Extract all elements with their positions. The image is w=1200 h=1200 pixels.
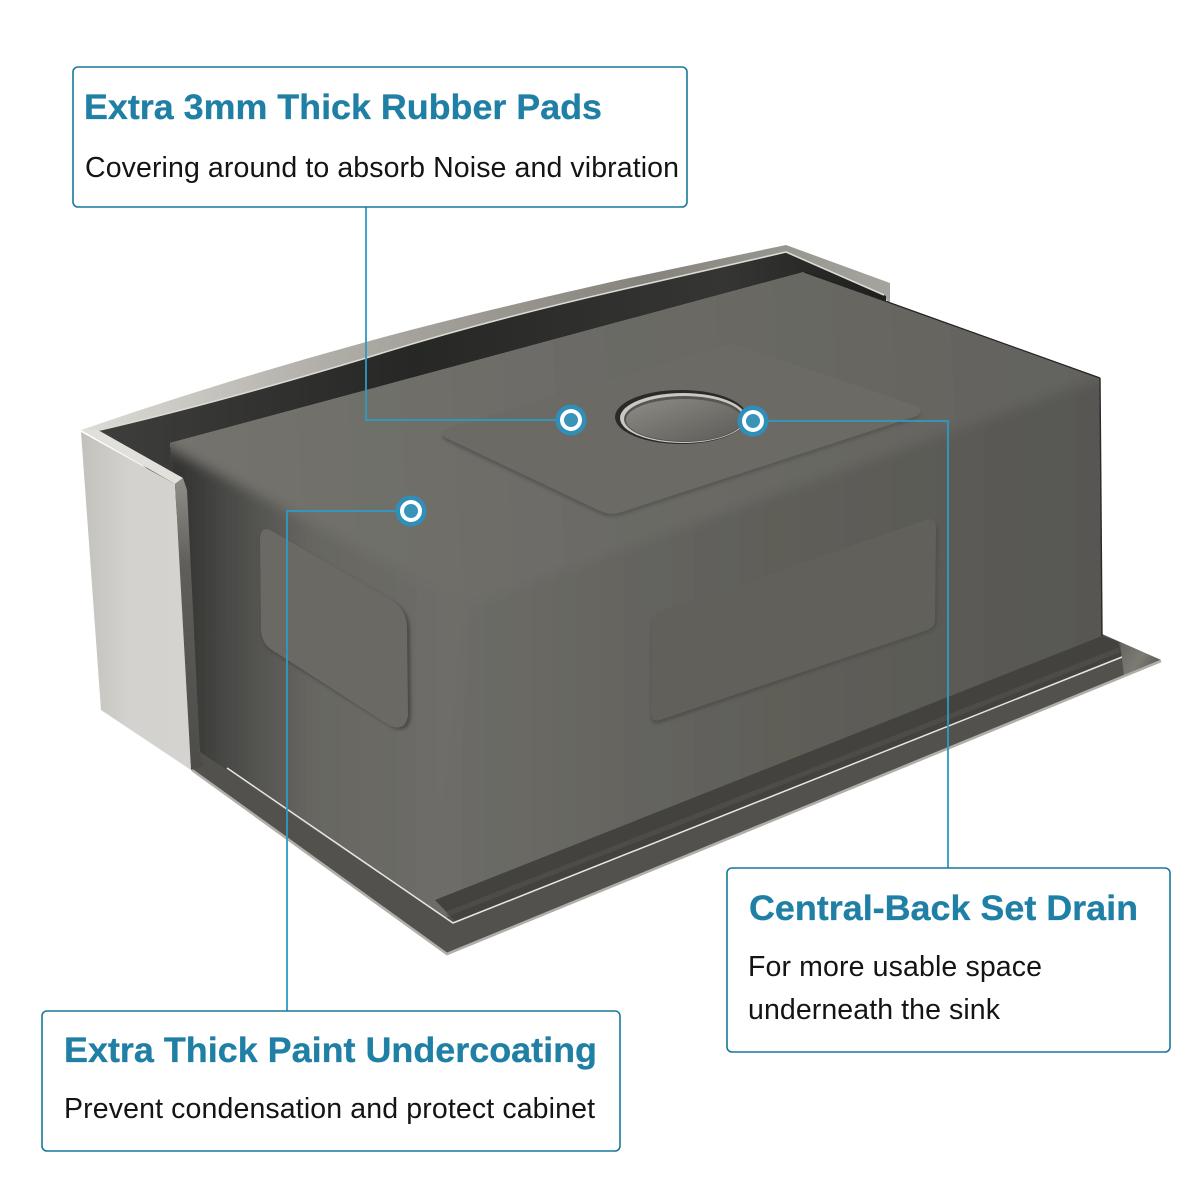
flange (192, 634, 1161, 953)
raised bottom strip (435, 636, 1122, 921)
marker: undercoating (396, 496, 426, 526)
heading: undercoating: Extra Thick Paint Undercoating (64, 1031, 597, 1070)
heading: rubber pads: Extra 3mm Thick Rubber Pads (84, 88, 602, 127)
text: undercoating: Prevent condensation and protect cabinet (64, 1093, 595, 1125)
callout: drain (727, 868, 1170, 1052)
text: drain: For more usable space (748, 951, 1042, 983)
leader line: undercoating (287, 511, 396, 1011)
callout: undercoating (42, 1011, 620, 1151)
text: drain: underneath the sink (748, 994, 1001, 1026)
marker: rubber pads (556, 404, 586, 436)
sink illustration (81, 240, 1161, 960)
right body face (442, 382, 1101, 918)
sink rim (81, 245, 890, 431)
callout: rubber pads (73, 67, 687, 207)
left body face (170, 442, 462, 909)
wall top edge (81, 430, 183, 484)
text: rubber pads: Covering around to absorb Noise and vibration (85, 152, 679, 184)
front wall (81, 432, 191, 770)
text: drain (748, 951, 1042, 1026)
left side pad (260, 529, 411, 730)
heading: drain: Central-Back Set Drain (749, 889, 1138, 928)
sink interior (98, 252, 886, 490)
leader line: drain (768, 421, 948, 868)
drain (615, 390, 747, 444)
wall inner strip (175, 478, 204, 770)
marker: drain (738, 406, 768, 436)
right side pad (651, 519, 938, 724)
top body face (170, 272, 804, 602)
top pad (443, 344, 920, 517)
leader line: rubber pads (366, 207, 556, 420)
sink body (170, 272, 1102, 918)
